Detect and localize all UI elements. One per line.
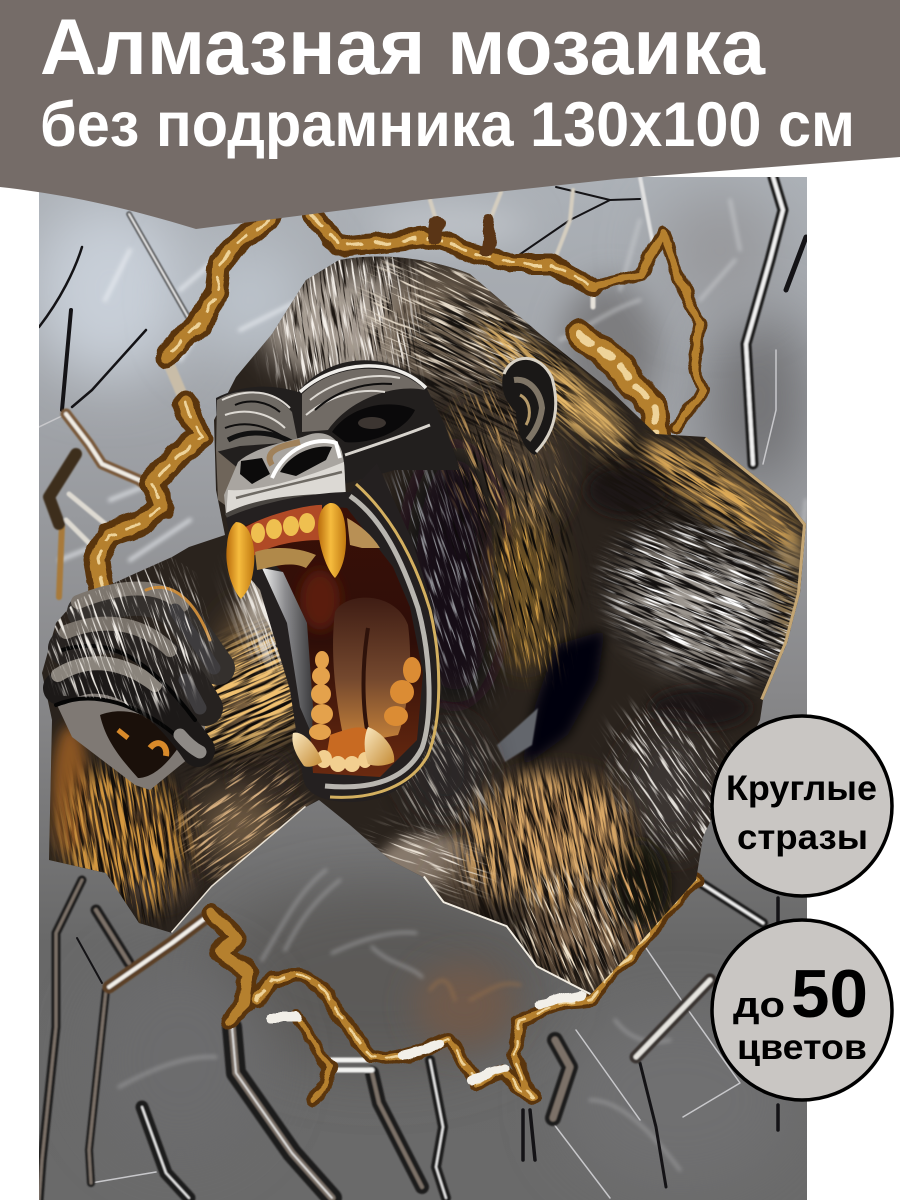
- fur body with tonal patches and hair streaks: [42, 256, 806, 995]
- silver jaw strip: [262, 568, 313, 735]
- inner cave: [240, 507, 423, 777]
- fingers: [56, 587, 218, 752]
- upper shoulder gold: [638, 435, 793, 544]
- lower left fang: [292, 733, 322, 767]
- gold cheek fur: [499, 515, 551, 665]
- gorilla: [42, 256, 806, 995]
- badge: up to 50 colours: цветов: [737, 1028, 867, 1067]
- badge: round rhinestones: [712, 716, 892, 896]
- subtitle: без подрамника 130х100 см: [40, 90, 855, 160]
- badge: round rhinestones: стразы: [737, 818, 868, 857]
- pale thin cracks: [39, 349, 777, 1199]
- upper left fang: [226, 522, 254, 599]
- black neck shadow: [520, 630, 605, 770]
- upper teeth: [251, 513, 315, 543]
- badge: round rhinestones: Круглые: [726, 769, 877, 808]
- dark streaks over head side and gold: [436, 416, 582, 667]
- lower front teeth: [316, 750, 372, 772]
- silver shoulder: [602, 516, 786, 690]
- crown of head: [260, 270, 430, 380]
- brow and upper face: [216, 360, 460, 510]
- finger hair: [43, 557, 214, 724]
- mouth: [226, 463, 442, 802]
- outer lip ring: [226, 463, 442, 802]
- nostrils: [240, 458, 270, 484]
- lower right teeth: [384, 657, 421, 726]
- forearm: [217, 610, 293, 750]
- badge: up to 50 colours: 50: [791, 956, 868, 1032]
- bright rim of fur at lower chest: [423, 877, 590, 995]
- title: Алмазная мозаика: [40, 2, 766, 91]
- grey skin flap: [497, 708, 538, 762]
- gold cracks around the hole: [96, 215, 703, 1100]
- muzzle and nose: [224, 433, 348, 516]
- tongue: [333, 598, 410, 745]
- foil background: [30, 177, 810, 1200]
- dark thin cracks: [39, 187, 806, 1187]
- badge: up to 50 colours: до: [733, 984, 785, 1025]
- badge: up to 50 colours: [712, 920, 892, 1100]
- fist: [43, 557, 235, 790]
- gums: [244, 505, 322, 560]
- dark hair streaks: [274, 256, 430, 392]
- ear: [502, 357, 557, 455]
- upper right fang: [318, 503, 346, 578]
- eye socket and eye: [332, 404, 415, 442]
- black cheek: [405, 445, 505, 705]
- brown chest: [485, 782, 625, 878]
- silver ribbon shards: [39, 177, 783, 1200]
- lower right fang: [365, 727, 394, 766]
- lower left teeth: [309, 651, 333, 740]
- foil folds: [60, 200, 806, 1170]
- painting: gorilla breaking through metallic foil: [18, 177, 844, 1200]
- light hair streaks: [255, 256, 432, 392]
- header banner: [0, 0, 900, 229]
